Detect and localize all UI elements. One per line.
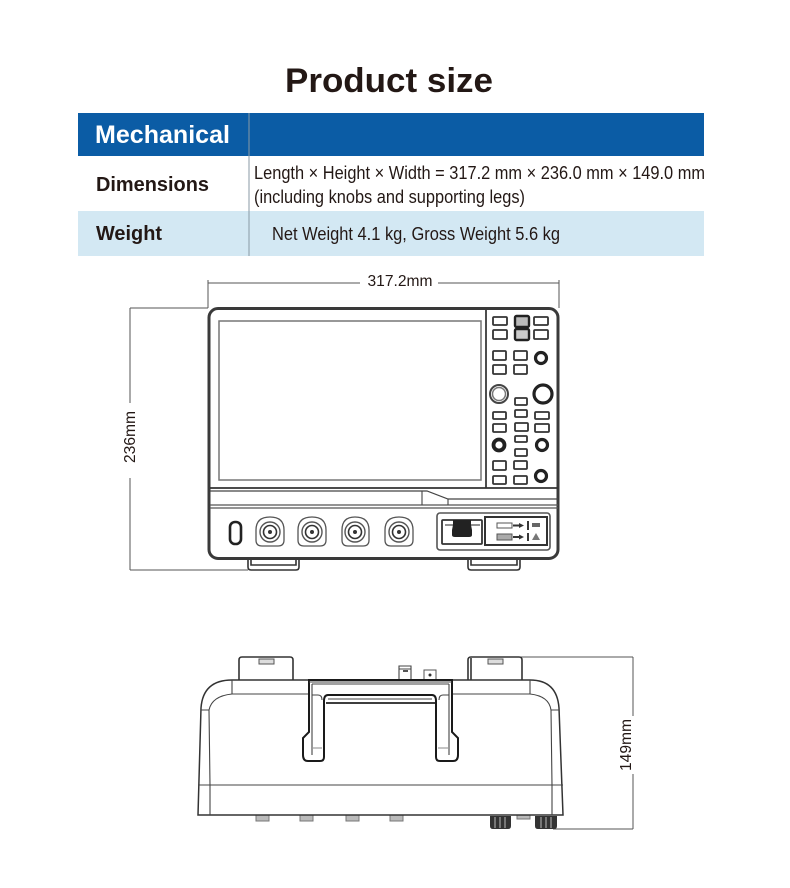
dimension: depth 149mm: 149mm [618, 719, 635, 771]
row: weight: Net Weight 4.1 kg, Gross Weight 5.6 kg [272, 224, 560, 244]
power button [230, 522, 241, 544]
control panel knobs [490, 352, 552, 482]
control panel buttons [493, 316, 549, 484]
port panel [437, 513, 550, 550]
bottom knobs [490, 816, 557, 829]
row: dimensions: (including knobs and supporting legs) [254, 187, 525, 207]
bottom ports [256, 815, 530, 821]
lower trim lines [210, 488, 558, 508]
carrying handle [303, 680, 458, 761]
row: weight: Weight [96, 223, 162, 245]
dimension: width 317.2mm: 317.2mm [368, 273, 432, 290]
top view of instrument [198, 657, 563, 829]
table: mechanical specifications [78, 113, 705, 256]
dimension: height 236mm: 236mm [122, 411, 139, 463]
rear feet [239, 657, 522, 680]
table header: Mechanical [95, 121, 230, 149]
table header [78, 113, 704, 156]
outer casing [198, 680, 563, 815]
title: Product size [285, 62, 493, 100]
front view of instrument [209, 308, 558, 570]
row: dimensions: Dimensions [96, 174, 209, 196]
control panel divider [485, 310, 487, 488]
casing detail lines [198, 680, 563, 815]
screen [219, 321, 481, 480]
row: dimensions [78, 156, 705, 211]
dimension: width 317.2mm [208, 273, 559, 308]
row: dimensions: Length × Height × Width = 317.2 mm × 236.0 mm × 149.0 mm [254, 163, 705, 183]
support feet [248, 558, 520, 570]
instrument body [209, 308, 558, 558]
row: weight [78, 211, 704, 256]
dimension: depth 149mm [520, 657, 635, 829]
dimension: height 236mm [122, 308, 248, 570]
BNC connectors [256, 517, 413, 546]
rear connectors [399, 666, 436, 680]
